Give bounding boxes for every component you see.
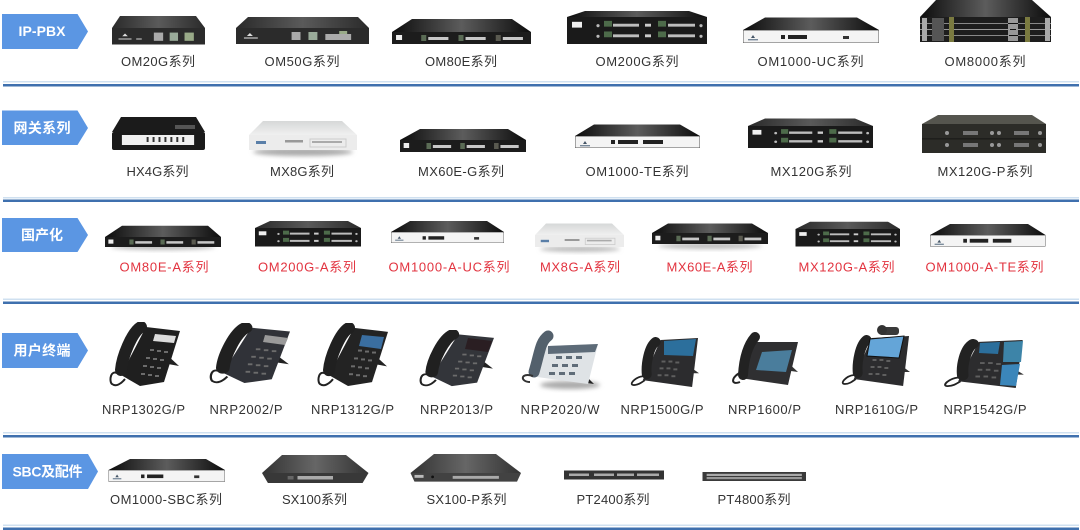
phone: NRP1610G/P	[835, 325, 918, 417]
device: OM200G-A: OM200G-A系列	[258, 260, 356, 274]
phone: NRP2013/P	[420, 334, 494, 417]
phone: NRP1312G/P	[311, 328, 394, 417]
device: MX8G-A	[535, 224, 624, 274]
device: MX120G	[748, 118, 873, 179]
phone: NRP2002/P: NRP2002/P	[210, 402, 282, 417]
device: MX60E-A: MX60E-A系列	[666, 260, 752, 274]
banner: IP-PBX	[2, 14, 88, 49]
device: OM1000-SBC	[108, 459, 225, 507]
phone: NRP1542G/P	[944, 340, 1026, 417]
device: OM1000-UC: OM1000-UC系列	[758, 54, 864, 69]
device: HX4G	[112, 117, 205, 179]
device: SX100-P: SX100-P系列	[426, 492, 506, 507]
device: OM1000-TE	[575, 124, 700, 179]
phone: NRP1600/P	[728, 337, 801, 417]
device: OM50G: OM50G系列	[264, 54, 340, 69]
device: PT2400	[564, 470, 664, 507]
device: MX8G	[249, 121, 357, 179]
phone: NRP1302G/P: NRP1302G/P	[102, 402, 185, 417]
phone: NRP2002/P	[210, 328, 290, 417]
device: MX120G-P	[922, 115, 1046, 179]
phone: NRP1500G/P: NRP1500G/P	[620, 402, 704, 417]
banner: 国产化: 国产化	[21, 227, 63, 243]
device: OM200G: OM200G系列	[596, 54, 678, 69]
banner: 网关系列	[2, 110, 88, 145]
device: OM20G	[112, 16, 205, 69]
device: OM80E-A	[105, 226, 221, 274]
divider line 2	[3, 197, 1079, 202]
banner: SBC及配件: SBC及配件	[12, 464, 82, 480]
device: HX4G: HX4G系列	[126, 164, 188, 179]
device: MX60E-G	[400, 129, 526, 179]
divider line 3	[3, 298, 1079, 304]
device: MX120G-A: MX120G-A系列	[798, 260, 894, 274]
device: OM1000-SBC: OM1000-SBC系列	[110, 492, 222, 507]
device: OM80E-A: OM80E-A系列	[120, 260, 208, 274]
device: OM1000-A-TE: OM1000-A-TE系列	[926, 260, 1044, 274]
device: PT4800	[702, 472, 806, 507]
panel: IP-PBX row	[2, 0, 1051, 69]
device: MX8G: MX8G系列	[270, 164, 334, 179]
device: PT4800: PT4800系列	[718, 492, 790, 507]
device: SX100	[262, 455, 368, 507]
phone: NRP1542G/P: NRP1542G/P	[944, 402, 1026, 417]
phone: NRP1302G/P	[102, 327, 185, 417]
phone: NRP1600/P: NRP1600/P	[728, 402, 801, 417]
banner: IP-PBX: IP-PBX	[18, 23, 66, 39]
divider line 1	[3, 81, 1079, 86]
device: OM1000-A-UC	[388, 221, 510, 274]
device: OM8000	[920, 0, 1051, 69]
panel: terminal row	[2, 325, 1026, 417]
device: MX60E-G: MX60E-G系列	[418, 164, 504, 179]
device: MX60E-A	[652, 224, 768, 274]
device: MX8G-A: MX8G-A系列	[540, 260, 620, 274]
phone: NRP1312G/P: NRP1312G/P	[311, 402, 394, 417]
device: SX100-P	[410, 454, 521, 507]
banner: SBC及配件	[2, 454, 98, 489]
device: OM1000-TE: OM1000-TE系列	[586, 164, 688, 179]
panel: gateway row	[2, 110, 1046, 179]
panel: domestic row	[2, 218, 1046, 274]
device: OM1000-UC	[743, 18, 879, 69]
device: OM1000-A-UC: OM1000-A-UC系列	[388, 260, 510, 274]
device: OM80E: OM80E系列	[425, 54, 497, 69]
device: OM50G	[236, 17, 369, 69]
divider line 4	[3, 432, 1079, 438]
banner: 网关系列: 网关系列	[14, 120, 70, 136]
device: OM200G-A	[255, 221, 361, 274]
device: OM20G: OM20G系列	[121, 54, 195, 69]
device: MX120G-A	[796, 222, 900, 274]
phone: NRP2020/W	[520, 336, 600, 417]
device: OM8000: OM8000系列	[944, 54, 1026, 69]
device: OM1000-A-TE	[926, 224, 1046, 274]
device: MX120G: MX120G系列	[770, 164, 852, 179]
banner: 用户终端: 用户终端	[14, 342, 70, 358]
banner: 用户终端	[2, 333, 88, 368]
device: SX100: SX100系列	[282, 492, 347, 507]
device: MX120G-P: MX120G-P系列	[938, 164, 1032, 179]
phone: NRP2013/P: NRP2013/P	[420, 402, 493, 417]
phone: NRP1500G/P	[620, 338, 704, 417]
phone: NRP1610G/P: NRP1610G/P	[835, 402, 918, 417]
phone: NRP2020/W: NRP2020/W	[520, 402, 600, 417]
device: PT2400: PT2400系列	[576, 492, 650, 507]
device: OM200G	[567, 11, 707, 69]
banner: 国产化	[2, 218, 88, 252]
divider line 5	[3, 524, 1079, 530]
device: OM80E	[392, 19, 531, 69]
panel: SBC row	[2, 454, 806, 507]
